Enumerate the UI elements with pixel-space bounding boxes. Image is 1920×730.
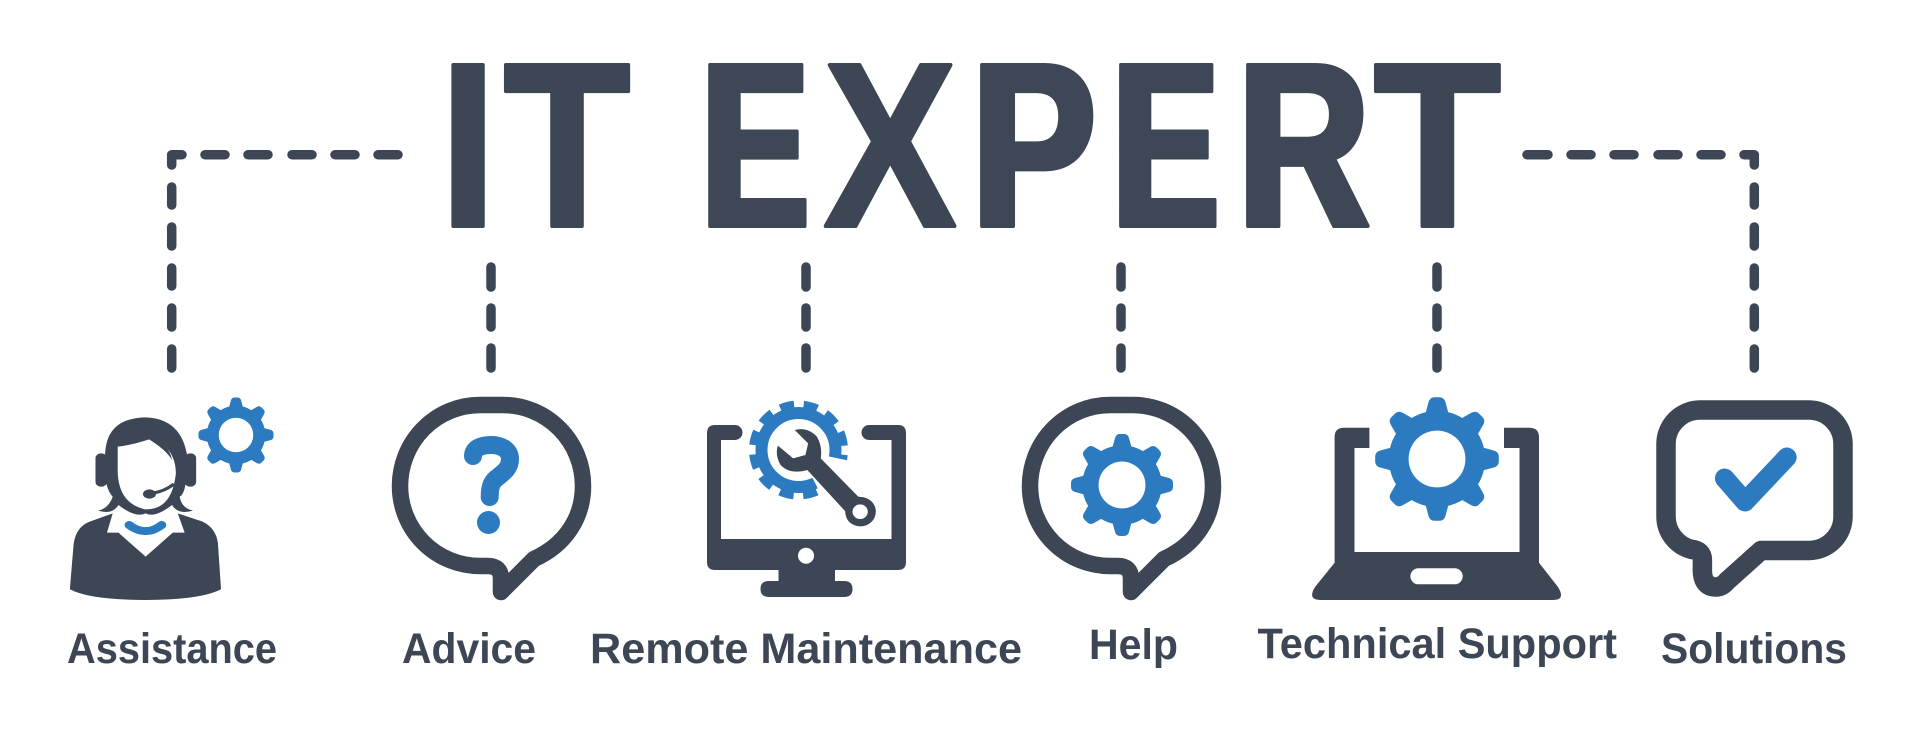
label: Technical Support: Technical Support [1258,620,1617,668]
icon: help speech bubble with gear [1030,405,1213,592]
dashed connector: title to Assistance [172,155,398,368]
title: IT EXPERT: R [1238,15,1369,276]
title: IT EXPERT: T [503,14,631,276]
title: IT EXPERT [439,14,1501,277]
dashed connector: title to Solutions [1527,155,1754,368]
label: Advice: Advice [402,625,536,673]
title: IT EXPERT: T [1373,15,1501,277]
label: Remote Maintenance: Remote Maintenance [590,625,1022,673]
label: Help: Help [1089,621,1178,669]
icon: technical support laptop with gear [1312,397,1561,600]
title: IT EXPERT: X [824,15,957,277]
dashed connector: Help [1116,267,1126,368]
title: IT EXPERT: I [439,14,497,276]
icon: solutions speech bubble with check mark [1666,410,1843,587]
title: IT EXPERT: E [1114,16,1218,277]
title: IT EXPERT: E [702,15,808,276]
icon: assistance agent with gear [70,398,274,600]
icon: remote maintenance monitor with gear and wrench [707,405,906,597]
label: Assistance: Assistance [67,625,277,673]
title: IT EXPERT: P [972,14,1096,276]
dashed connector: Remote Maintenance [801,267,811,368]
label: Solutions: Solutions [1661,625,1847,673]
icon: advice speech bubble with question mark [400,405,583,592]
dashed connector: Advice [486,267,496,368]
dashed connector: Technical Support [1432,267,1442,368]
